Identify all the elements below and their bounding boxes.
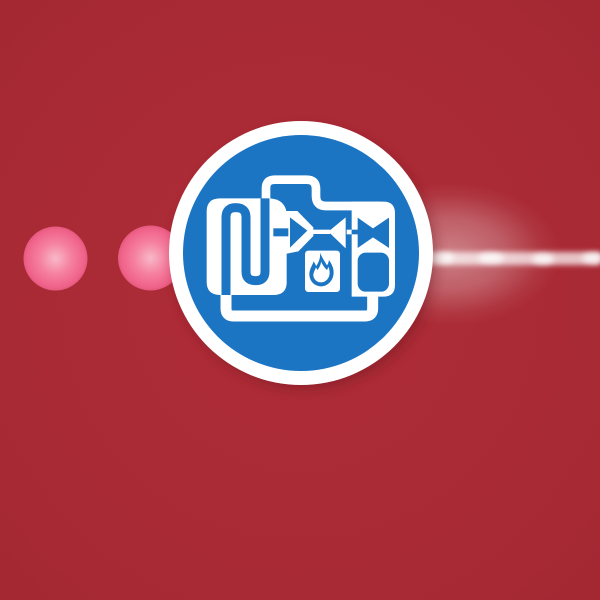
serpentine coil <box>226 198 265 295</box>
valve link square <box>347 230 352 234</box>
pink ball right <box>118 226 183 290</box>
amplifier housing <box>285 211 313 254</box>
icon: process diagram <box>207 180 395 316</box>
badge circle <box>169 121 433 385</box>
valve link stub <box>352 230 358 234</box>
flame inner <box>313 261 330 282</box>
input stub <box>273 228 288 236</box>
triangle right <box>290 217 307 248</box>
light beam <box>425 252 600 265</box>
pink ball left <box>24 226 88 290</box>
fire box <box>305 251 340 292</box>
circle shadow <box>174 127 436 389</box>
connector line <box>312 230 330 234</box>
valve <box>358 218 389 248</box>
top pipe <box>266 180 380 206</box>
tank <box>358 253 389 292</box>
triangle left <box>328 217 346 248</box>
bottom pipe <box>226 293 373 316</box>
flame <box>309 253 334 286</box>
left coil body <box>207 198 287 295</box>
right tank panel <box>352 202 395 297</box>
glow behind beam <box>340 182 560 326</box>
